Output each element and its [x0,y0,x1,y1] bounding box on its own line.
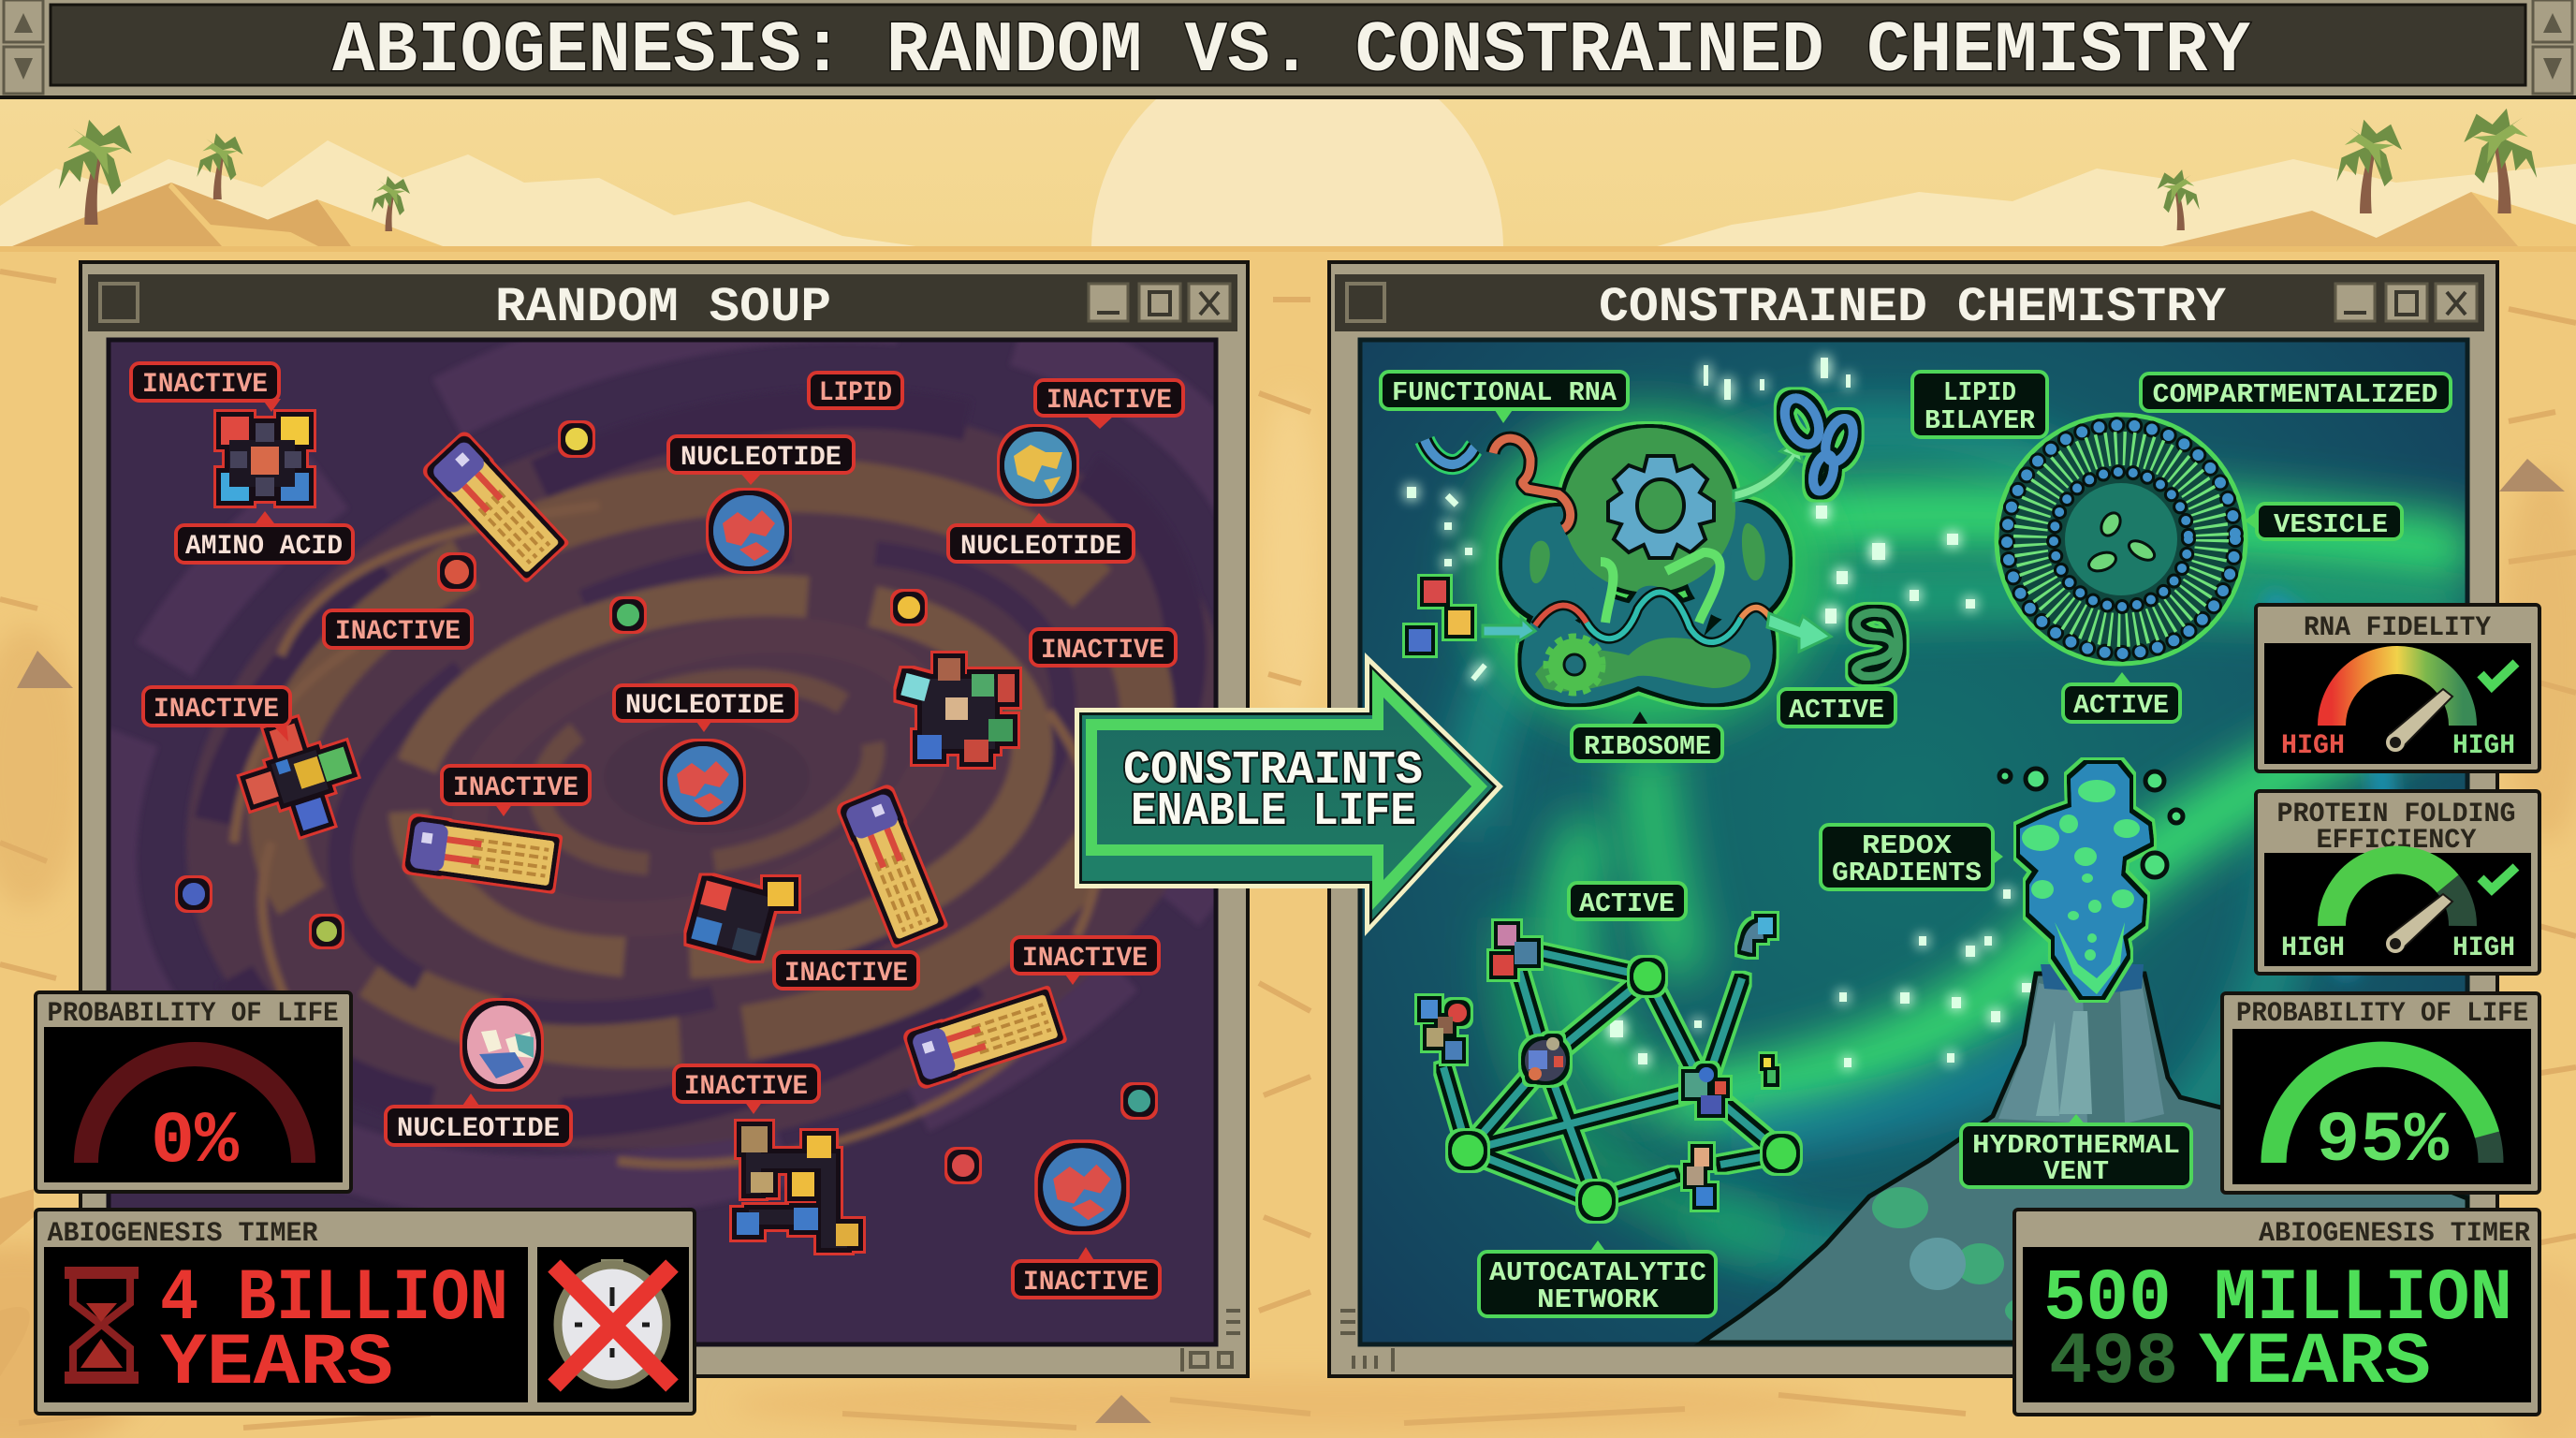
arrow text: CONSTRAINTS [1123,744,1423,798]
ribosome [1409,393,1898,703]
left dunes [12,183,443,246]
small gear [1546,637,1603,693]
water plume [2020,764,2150,996]
gauge arc [2332,860,2463,926]
cluster: right [1685,1067,1726,1114]
gauge arc [2274,1054,2491,1163]
gauge label: HIGH [2281,932,2345,964]
hydrothermal vent [1702,764,2467,1343]
panel: constrained chemistry window [1329,262,2497,1376]
window frame [80,262,1248,1376]
gauge value: 0% [151,1101,239,1183]
molecule: tilted square cluster [691,881,794,956]
label: inactive [1012,937,1159,985]
label: active: ACTIVE [1579,888,1675,919]
check mark [2481,867,2516,889]
label: redox gradients: GRADIENTS [1832,858,1982,888]
label: autocatalytic network [1479,1240,1716,1316]
mossy blotches [1872,1187,2057,1326]
label: inactive [131,363,281,412]
label: nucleotide: NUCLEOTIDE [960,531,1121,563]
molecule: lipid capsule [431,439,560,574]
label: compartmentalized: COMPARTMENTALIZED [2153,379,2437,410]
gauge needle [2388,689,2452,750]
functional RNA: red strand [1493,438,1571,529]
panel: probability of life 95% [2222,993,2539,1193]
label: nucleotide [614,685,797,732]
plume bubbles [2022,780,2140,994]
label: inactive [442,766,590,816]
inner phosphate heads [2054,472,2188,607]
network molecule clusters [1493,925,1537,976]
cluster: upper right [1741,917,1773,953]
gauge label: HIGH [2452,932,2515,964]
window heading: RANDOM SOUP [495,280,831,335]
molecule: mixed cluster [900,658,1015,762]
title text: ABIOGENESIS: RANDOM VS. CONSTRAINED CHEMISTRY [332,11,2251,93]
label: inactive: INACTIVE [1022,943,1148,975]
lipid tails [2030,448,2212,630]
label: inactive: INACTIVE [1023,1267,1149,1299]
label: inactive [1013,1247,1160,1299]
panel: abiogenesis timer 500 million [2014,1210,2539,1415]
panel: probability of life 0% [36,992,351,1192]
label: nucleotide: NUCLEOTIDE [397,1113,560,1145]
vesicle [1997,415,2246,664]
label: lipid bilayer: BILAYER [1925,405,2036,436]
panel: random soup window [0,154,1405,1376]
panel: RNA fidelity [2256,605,2539,771]
label: functional RNA [1381,372,1628,423]
network nodes [1452,961,1796,1217]
label: redox gradients [1821,825,2003,889]
tRNA strands [1601,552,1720,623]
window frame [1329,262,2497,1376]
icon: crossed stopwatch [554,1259,672,1386]
icon: folded blue knot [1778,393,1858,493]
desert rocks [17,459,2565,1423]
glowing swirl background [1360,340,2471,1367]
nucleotide sphere [713,495,784,566]
label: inactive: INACTIVE [1041,635,1164,667]
soup swirl background [0,154,1405,1344]
floating bubbles [1999,769,2183,877]
network bonds [1443,946,1781,1201]
sand shading [0,393,2576,1438]
label: inactive: INACTIVE [154,694,279,726]
panel: abiogenesis timer 4 billion: YEARS [160,1323,393,1405]
label: active [2063,672,2180,722]
label: vesicle [2245,504,2402,540]
window bottom scrollbar [1182,1311,1240,1372]
label: amino acid [176,511,353,563]
title bar [0,0,2576,99]
window title bar [88,274,1237,331]
functional RNA: blue strand [1425,440,1474,464]
arrow: input [1483,618,1535,641]
gauge low label: HIGH [2281,730,2345,762]
volcano rock base [1702,974,2467,1343]
label: nucleotide [668,436,854,485]
panel: probability of life 0%: PROBABILITY OF LIFE [47,998,339,1030]
nucleotide sphere: yellow [1004,432,1072,499]
label: inactive [143,687,290,741]
panel: abiogenesis timer 500 million: ABIOGENESIS TIMER [2259,1218,2530,1250]
label: inactive: INACTIVE [142,369,268,401]
window heading: CONSTRAINED CHEMISTRY [1599,280,2227,335]
molecule: node cluster [737,1126,858,1246]
label: inactive: INACTIVE [453,772,578,804]
vesicle lumen [2065,483,2177,595]
panel: protein folding efficiency: PROTEIN FOLDING [2276,799,2516,830]
nucleotide sphere: pink [467,1005,536,1084]
label: inactive: INACTIVE [335,616,461,648]
label: nucleotide [948,513,1134,563]
palm trees [59,109,2537,231]
panel: RNA fidelity: RNA FIDELITY [2304,612,2491,644]
right dunes [2162,192,2576,246]
molecule: lipid capsule [911,993,1059,1081]
soup molecules [183,417,1150,1246]
timer value: 4 BILLION [160,1258,508,1341]
cluster: left [1421,1000,1467,1060]
outer phosphate heads [2007,425,2235,653]
label: active: ACTIVE [2073,690,2169,721]
small molecule dots [183,428,1150,1177]
label: vesicle: VESICLE [2274,509,2388,540]
soup labels [131,363,1183,1299]
window title bar [1335,274,2484,331]
window bottom scrollbar [1340,1311,1393,1372]
timer faded digits: 498 [2049,1322,2178,1404]
label: ribosome: RIBOSOME [1584,731,1711,762]
nucleotide sphere [1043,1148,1121,1226]
molecule: amino acid grid [221,417,309,501]
label: nucleotide [386,1093,571,1145]
molecule: lipid capsule [409,821,555,887]
icon: hourglass [65,1267,139,1384]
label: amino acid: AMINO ACID [185,531,343,563]
timer units: YEARS [2199,1322,2431,1404]
arrow: constraints enable life [1075,653,1503,936]
label: hydrothermal vent: HYDROTHERMAL [1972,1130,2180,1161]
label: inactive: INACTIVE [784,958,908,990]
label: nucleotide: NUCLEOTIDE [625,690,784,722]
volcano ridges [1998,983,2164,1123]
label: lipid bilayer [1912,372,2047,437]
panel: abiogenesis timer 4 billion [36,1210,695,1414]
autocatalytic network [1421,917,1796,1217]
label: inactive: INACTIVE [684,1071,808,1103]
label: redox gradients: REDOX [1862,830,1953,861]
label: autocatalytic network: NETWORK [1537,1284,1660,1315]
gauge needle [2388,894,2452,951]
label: inactive [674,1065,819,1114]
label: autocatalytic network: AUTOCATALYTIC [1489,1257,1706,1288]
label: active: ACTIVE [1789,695,1884,726]
label: hydrothermal vent: VENT [2043,1156,2109,1187]
label: active [1778,689,1895,726]
panel: probability of life 95%: PROBABILITY OF LIFE [2236,998,2528,1030]
nucleotide sphere [667,746,739,817]
cluster: lower [1687,1148,1713,1206]
ribosome gear [1608,456,1714,558]
check mark [2481,663,2516,686]
label: ribosome [1572,712,1722,762]
cluster: center [1525,1037,1566,1081]
icon: green coil [1856,612,1898,677]
label: inactive: INACTIVE [1046,385,1172,417]
mRNA strand [1535,593,1774,642]
arrow: output [1767,613,1831,652]
panel: protein folding efficiency: EFFICIENCY [2316,825,2477,857]
gauge value: 95% [2316,1101,2449,1181]
scroll buttons [4,0,2572,94]
sun [1091,43,1503,249]
panel: abiogenesis timer 4 billion: ABIOGENESIS TIMER [47,1218,318,1250]
small green fragment [1764,1058,1776,1083]
gauge arc [2332,660,2463,726]
molecule: lipid capsule [844,792,940,940]
molecule: cross cluster [234,712,364,843]
label: nucleotide: NUCLEOTIDE [681,442,842,474]
arrow: to folded rna [1734,440,1803,501]
timer value: 500 MILLION [2043,1258,2512,1341]
label: functional RNA: FUNCTIONAL RNA [1392,377,1617,408]
amino acid blocks [1409,580,1471,652]
chemistry labels [1381,372,2451,1316]
arrow: constraints enable life: ENABLE LIFE [1131,785,1416,839]
gauge high label: HIGH [2452,730,2515,762]
sparkles [1407,358,2067,1067]
label: inactive [1035,380,1183,429]
label: hydrothermal vent [1961,1114,2191,1187]
panel: protein folding efficiency [2256,791,2539,974]
gauge arc [86,1054,303,1163]
label: lipid: LIPID [819,377,892,409]
label: lipid bilayer: LIPID [1943,377,2016,408]
